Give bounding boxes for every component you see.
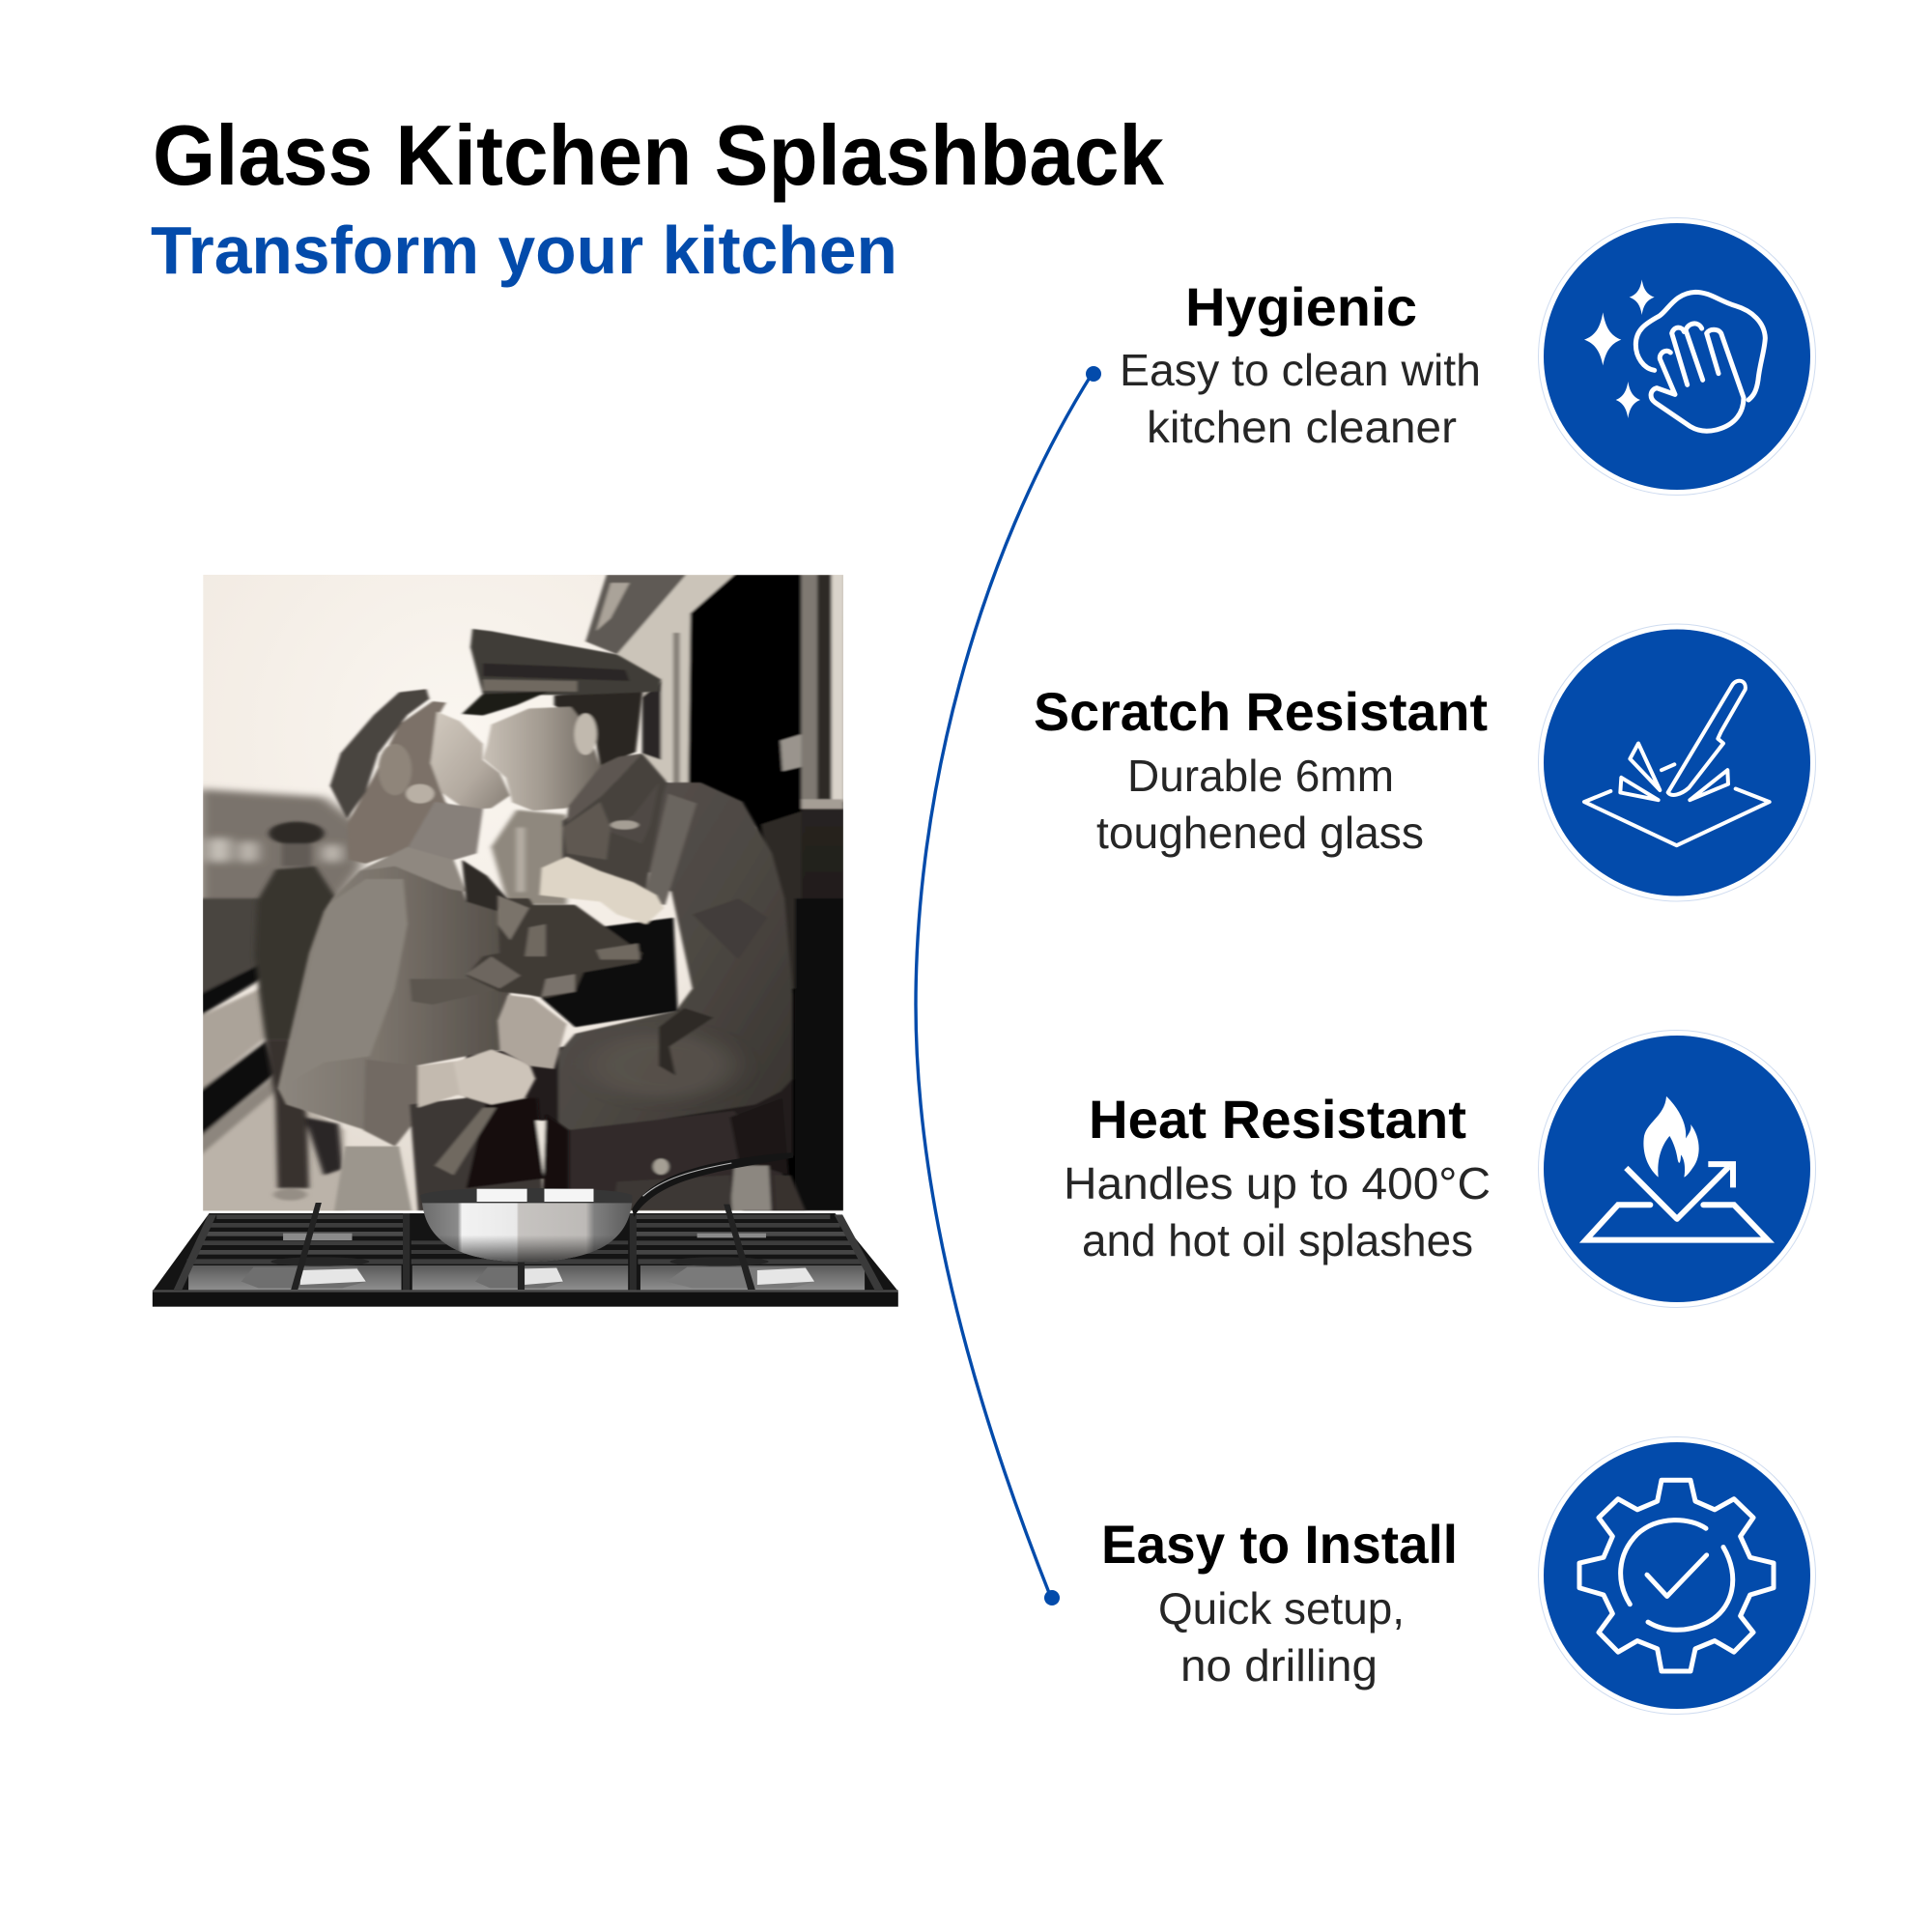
feature: hygienic text: kitchen cleaner bbox=[1147, 402, 1457, 452]
feature: hygienic text: Hygienic bbox=[1185, 276, 1417, 337]
photo: couple kissing at train station bbox=[198, 575, 845, 1214]
feature: heat resistant text: Heat Resistant bbox=[1089, 1089, 1466, 1150]
feature: heat resistant text: Handles up to 400°C bbox=[1064, 1158, 1491, 1208]
soldier bbox=[462, 629, 806, 1210]
feature: easy to install text: no drilling bbox=[1180, 1640, 1378, 1690]
gas hob with grates bbox=[153, 1203, 898, 1307]
feature: heat resistant text: and hot oil splashes bbox=[1082, 1215, 1473, 1265]
feature: easy to install text: Quick setup, bbox=[1158, 1583, 1405, 1634]
right train carriage bbox=[585, 575, 845, 1210]
feature: easy to install text: Easy to Install bbox=[1101, 1514, 1458, 1575]
subtitle: Transform your kitchen bbox=[151, 213, 897, 288]
icon: knife scratching glass bbox=[1538, 624, 1816, 901]
title: Glass Kitchen Splashback bbox=[153, 107, 1165, 203]
feature: scratch resistant text: Scratch Resistant bbox=[1034, 681, 1488, 742]
feature: easy to install text bbox=[1101, 1514, 1458, 1690]
woman bbox=[277, 689, 569, 1210]
feature: scratch resistant text: toughened glass bbox=[1096, 808, 1424, 858]
feature: heat resistant text bbox=[1064, 1089, 1491, 1265]
icon: gear with check mark bbox=[1538, 1437, 1816, 1714]
icon: flame over surface bbox=[1538, 1030, 1816, 1308]
feature: hygienic text: Easy to clean with bbox=[1120, 345, 1481, 395]
feature: scratch resistant text: Durable 6mm bbox=[1127, 751, 1394, 801]
connector curve with end dots bbox=[916, 366, 1101, 1605]
frying pan bbox=[420, 1152, 793, 1262]
feature: scratch resistant text bbox=[1034, 681, 1488, 858]
feature: hygienic text bbox=[1120, 276, 1481, 452]
icon: hand wiping with sparkles bbox=[1538, 218, 1816, 495]
flower bouquet bbox=[467, 857, 678, 1069]
